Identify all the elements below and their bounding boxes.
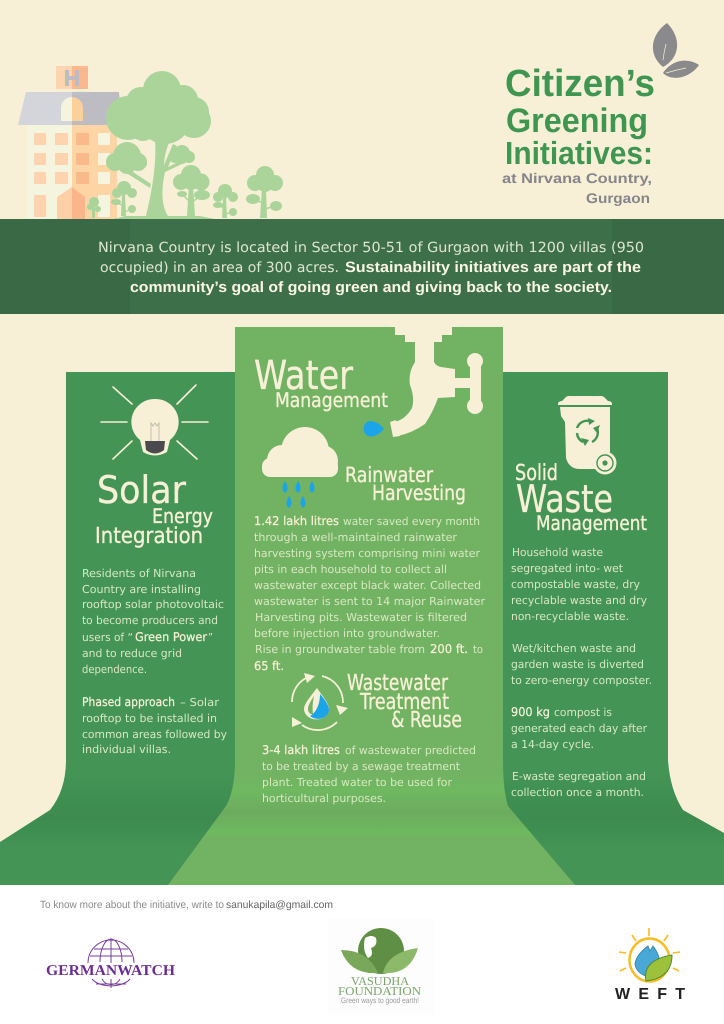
text: wastewater description: 3-4 lakh litres (262, 743, 340, 757)
text: waste description: Household waste (512, 546, 603, 559)
text: rainwater description: through a well-maintained rainwater (254, 531, 457, 544)
text: contact line: To know more about the initiative, write to (40, 899, 224, 911)
text: wastewater description (262, 743, 476, 805)
heading: solid waste management: Waste (516, 477, 613, 521)
text: waste description (511, 546, 652, 799)
text: solar description: dependence. (82, 663, 147, 676)
text: solar description: to become producers and (82, 614, 218, 627)
heading: solid waste management (515, 461, 647, 535)
text: waste description: 900 kg (511, 705, 550, 719)
heading: wastewater treatment and reuse: & Reuse (391, 708, 462, 733)
text: wastewater description: to be treated by a sewage treatment (262, 760, 461, 773)
footer (0, 885, 724, 1024)
subtitle (502, 170, 652, 206)
text: waste description: garden waste is diverted (511, 658, 644, 671)
text: rainwater description: 65 ft. (254, 659, 284, 673)
heading: solar energy integration (95, 468, 213, 549)
text: solar description: common areas followed by (82, 728, 227, 741)
icon: rain cloud (262, 427, 338, 508)
heading: wastewater treatment and reuse: Wastewater (347, 671, 449, 696)
title (505, 63, 655, 171)
text: solar description: – Solar (180, 696, 219, 709)
logo: Vasudha Foundation: VASUDHA (351, 974, 409, 988)
logo: Vasudha Foundation: FOUNDATION (338, 984, 421, 998)
intro text: Nirvana Country is located in Sector 50-51 of Gurgaon with 1200 villas (950 (98, 240, 644, 256)
text: rainwater description: before injection into groundwater. (254, 627, 440, 640)
text: rainwater description: 1.42 lakh litres (254, 514, 339, 528)
icon: water tap (390, 327, 483, 437)
intro text: Sustainability initiatives are part of the (345, 259, 641, 276)
text: solar description: rooftop solar photovoltaic (82, 598, 224, 611)
text: waste description: compost is (554, 706, 612, 719)
panel: solid waste (500, 372, 724, 885)
icon: grey leaves (653, 23, 699, 78)
logo: WEFT: WEFT (615, 986, 685, 1003)
heading: solid waste management: Management (536, 511, 647, 535)
title: Citizen’s (505, 63, 655, 105)
icon: light bulb (101, 385, 208, 459)
text: solar description: ” (208, 631, 213, 644)
panel: water management (168, 327, 575, 885)
heading: water management (254, 353, 388, 412)
title: Greening (506, 102, 648, 140)
text: rainwater description (254, 514, 485, 673)
illustration: building and trees (18, 66, 283, 219)
heading: solar energy integration: Energy (152, 504, 213, 528)
heading: rainwater harvesting (345, 463, 466, 505)
text: solar description: rooftop to be installed in (82, 712, 217, 725)
heading: wastewater treatment and reuse: Treatment (359, 690, 449, 715)
heading: rainwater harvesting: Rainwater (345, 463, 433, 487)
heading: solar energy integration: Solar (97, 468, 186, 512)
heading: solar energy integration: Integration (95, 524, 203, 549)
text: waste description: generated each day after (511, 722, 647, 735)
title: Initiatives: (505, 135, 653, 171)
text: waste description: to zero-energy composter. (511, 674, 652, 687)
text: waste description: E-waste segregation and (512, 770, 646, 783)
text: solar description: Green Power (135, 630, 207, 644)
text: rainwater description: Harvesting pits. Wastewater is filtered (255, 611, 467, 624)
heading: solid waste management: Solid (515, 461, 558, 486)
intro band (0, 219, 724, 314)
text: waste description: compostable waste, dry (511, 578, 640, 591)
text: rainwater description: harvesting system comprising mini water (254, 547, 480, 560)
text: wastewater description: of wastewater predicted (345, 744, 476, 757)
text: rainwater description: wastewater is sent to 14 major Rainwater (254, 595, 485, 608)
text: rainwater description: pits in each household to collect all (254, 563, 447, 576)
icon: recycling bin (558, 396, 616, 474)
logo: WEFT (615, 928, 685, 1003)
text: solar description (82, 567, 227, 756)
text: waste description: segregated into- wet (511, 562, 624, 575)
intro text: community’s goal of going green and giving back to the society. (130, 279, 612, 296)
text: rainwater description: wastewater except black water. Collected (254, 579, 481, 592)
icon: water recycling (292, 673, 348, 730)
intro text: occupied) in an area of 300 acres. (100, 260, 339, 276)
logo: Vasudha Foundation: Green ways to good earth! (341, 996, 419, 1005)
heading: water management: Water (254, 353, 353, 399)
subtitle: Gurgaon (586, 190, 650, 206)
text: wastewater description: plant. Treated water to be used for (262, 776, 452, 789)
text: rainwater description: water saved every month (343, 515, 480, 528)
heading: water management: Management (275, 388, 388, 412)
logo: Germanwatch (46, 939, 175, 988)
subtitle: at Nirvana Country, (502, 170, 652, 186)
text: solar description: Country are installing (82, 583, 201, 596)
text: contact line: sanukapila@gmail.com (226, 899, 333, 911)
icon: hotel building (18, 66, 122, 219)
text: solar description: Residents of Nirvana (82, 567, 196, 580)
text: solar description: users of “ (82, 631, 133, 644)
text: rainwater description: Rise in groundwater table from (255, 643, 425, 656)
text: solar description: individual villas. (82, 743, 171, 756)
logo: Vasudha Foundation (328, 918, 435, 1015)
text: solar description: and to reduce grid (82, 647, 182, 660)
logo: Germanwatch: GERMANWATCH (46, 963, 175, 979)
panel: solar energy (0, 372, 240, 885)
text: contact line (40, 899, 333, 911)
text: rainwater description: to (473, 643, 483, 656)
text: waste description: recyclable waste and dry (511, 594, 647, 607)
intro text (98, 240, 644, 296)
text: waste description: collection once a month. (511, 786, 644, 799)
heading: wastewater treatment and reuse (347, 671, 462, 733)
text: waste description: Wet/kitchen waste and (512, 642, 636, 655)
text: solar description: Phased approach (82, 695, 175, 709)
icon: trees (87, 71, 283, 219)
text: waste description: a 14-day cycle. (511, 738, 594, 751)
icon: blue drop (364, 421, 384, 437)
heading: rainwater harvesting: Harvesting (372, 481, 466, 505)
text: waste description: non-recyclable waste. (511, 610, 629, 623)
text: wastewater description: horticultural purposes. (262, 792, 386, 805)
text: rainwater description: 200 ft. (430, 642, 468, 656)
